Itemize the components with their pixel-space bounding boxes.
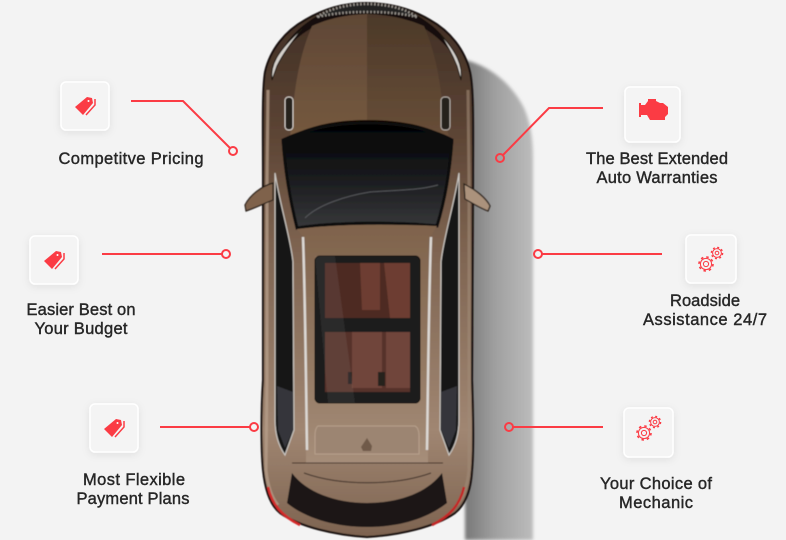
cowl band — [283, 120, 452, 146]
connector: roadside — [534, 250, 662, 258]
right tail light — [432, 487, 464, 525]
left rear quarter glass — [277, 386, 293, 448]
connector: flexible plans — [160, 423, 258, 431]
connector: mechanic — [505, 423, 603, 431]
item: flexible plans icon — [90, 404, 138, 452]
label: flexible plans: Payment Plans — [76, 490, 190, 508]
left hood vent — [285, 97, 293, 130]
right edge highlight — [457, 90, 469, 505]
left tail light — [268, 487, 300, 525]
sunroof rear pane — [325, 332, 410, 392]
label: mechanic: Mechanic — [619, 494, 693, 512]
sunroof frame — [315, 256, 420, 403]
item: warranties icon — [625, 87, 680, 142]
label: warranties: The Best Extended — [586, 150, 728, 168]
item: easier best icon — [30, 236, 78, 284]
right hood vent — [441, 97, 450, 130]
label: competitive pricing: Competitve Pricing — [58, 150, 204, 168]
connector: competitive pricing — [131, 101, 237, 155]
label: roadside — [643, 292, 767, 329]
label: roadside: Assistance 24/7 — [643, 311, 767, 329]
label: easier best: Your Budget — [34, 320, 128, 338]
right rear quarter glass — [441, 386, 457, 448]
sunroof reflection — [315, 256, 355, 403]
left headlight — [272, 28, 303, 80]
hood right — [367, 14, 449, 136]
connector: warranties — [496, 108, 603, 162]
label: mechanic: Your Choice of — [600, 475, 712, 493]
left mirror — [245, 183, 273, 211]
right mirror — [464, 184, 490, 211]
rear badge — [361, 438, 372, 451]
roof panel — [297, 225, 437, 463]
hood left — [290, 14, 367, 136]
item: roadside icon — [686, 235, 736, 283]
left side window — [275, 173, 294, 455]
left roof rail — [303, 237, 307, 450]
front fascia dark band — [276, 5, 458, 62]
rear bumper — [287, 473, 447, 527]
connector: easier best — [102, 250, 230, 258]
label: mechanic — [600, 475, 712, 512]
label: warranties: Auto Warranties — [596, 169, 718, 187]
right roof rail — [427, 237, 431, 450]
car shadow — [465, 60, 533, 540]
label: flexible plans: Most Flexible — [83, 471, 185, 489]
dashboard detail — [305, 185, 438, 218]
sunroof front pane — [325, 263, 410, 318]
right headlight — [440, 34, 461, 80]
label: easier best — [26, 301, 136, 338]
grille — [317, 4, 417, 17]
car body — [262, 3, 473, 537]
windshield — [283, 123, 452, 228]
right side window — [440, 173, 459, 455]
left edge highlight — [266, 90, 278, 505]
item: competitive pricing icon — [61, 82, 109, 130]
item: mechanic icon — [624, 408, 673, 457]
label: flexible plans — [76, 471, 190, 508]
tail panel — [315, 426, 419, 454]
label: roadside: Roadside — [670, 292, 740, 310]
label: warranties — [586, 150, 728, 187]
rear tailgate line — [292, 463, 443, 483]
label: easier best: Easier Best on — [26, 301, 136, 319]
car top view — [245, 3, 490, 537]
